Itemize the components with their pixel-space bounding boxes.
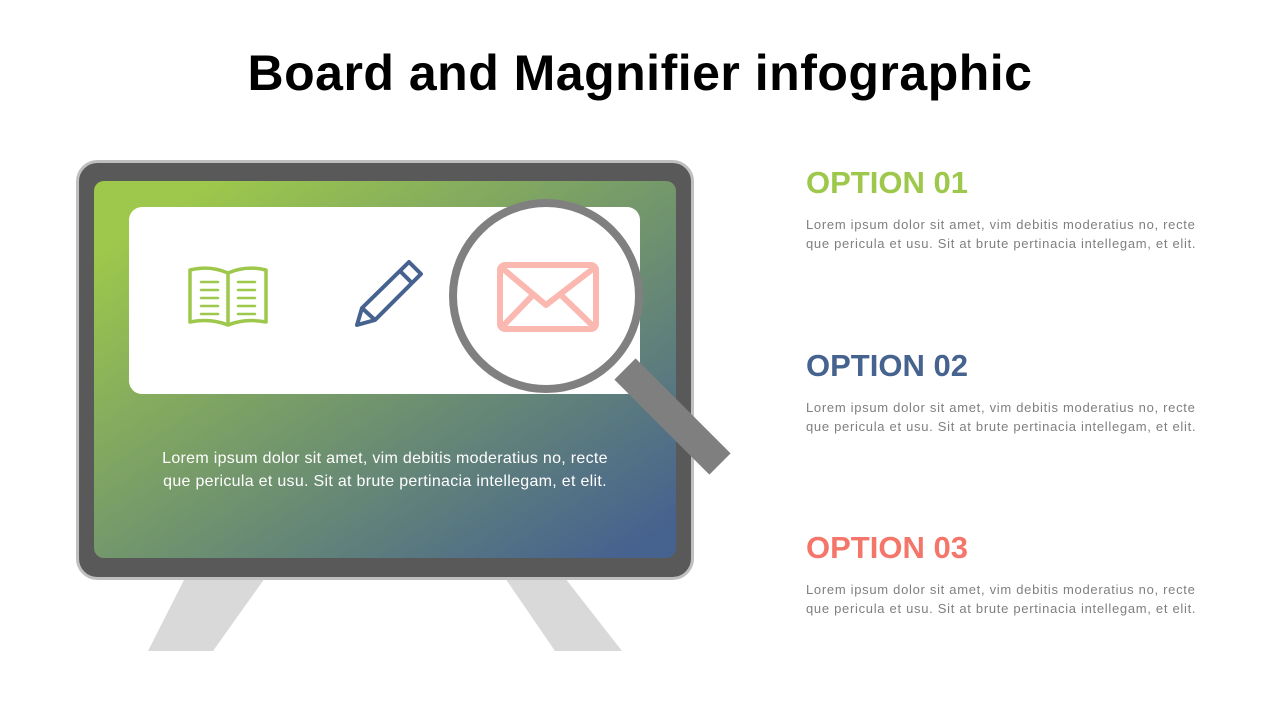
icon: book <box>190 268 266 325</box>
option 02: OPTION 02 <box>806 348 968 383</box>
option 02: que pericula et usu. Sit at brute pertinacia intellegam, et elit. <box>806 419 1196 434</box>
board text: que pericula et usu. Sit at brute pertinacia intellegam, et elit. <box>163 473 607 490</box>
option 01: OPTION 01 <box>806 165 968 200</box>
option 02: Lorem ipsum dolor sit amet, vim debitis moderatius no, recte <box>806 400 1196 415</box>
white card <box>129 207 640 394</box>
board frame <box>78 162 692 578</box>
icon: envelope <box>500 265 596 329</box>
option 03: que pericula et usu. Sit at brute pertinacia intellegam, et elit. <box>806 601 1196 616</box>
board text: Lorem ipsum dolor sit amet, vim debitis moderatius no, recte <box>162 450 608 467</box>
option 01 <box>806 165 1196 251</box>
icon: pencil <box>357 262 421 325</box>
option 02 <box>806 348 1196 434</box>
option 01: Lorem ipsum dolor sit amet, vim debitis moderatius no, recte <box>806 217 1196 232</box>
magnifier <box>453 203 720 464</box>
option 03: Lorem ipsum dolor sit amet, vim debitis moderatius no, recte <box>806 582 1196 597</box>
board legs <box>148 578 622 651</box>
option 03 <box>806 530 1196 616</box>
title: Board and Magnifier infographic <box>248 45 1032 101</box>
board text <box>162 450 608 490</box>
option 01: que pericula et usu. Sit at brute pertinacia intellegam, et elit. <box>806 236 1196 251</box>
option 03: OPTION 03 <box>806 530 968 565</box>
